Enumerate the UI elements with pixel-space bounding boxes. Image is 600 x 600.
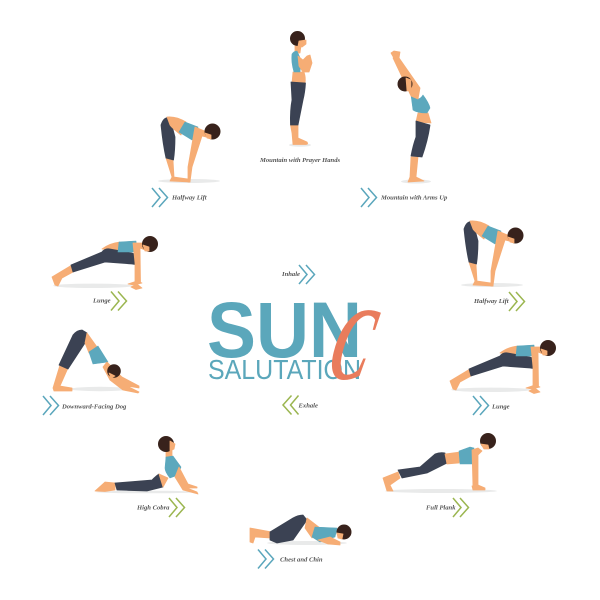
pose: Mountain with Arms Up (361, 51, 448, 207)
breath key: inhale (281, 265, 314, 284)
arrow: chevrons (169, 498, 184, 517)
label: Downward-Facing Dog: Downward-Facing Dog (61, 404, 127, 410)
arrow: inhale chevrons (299, 265, 314, 284)
figure: halfway lift (461, 221, 524, 287)
pose: Lunge (right) (450, 340, 556, 415)
pose: High Cobra (95, 436, 198, 517)
label: Mountain with Arms Up: Mountain with Arms Up (380, 194, 448, 202)
figure: mountain arms up (391, 51, 431, 184)
title word: SALUTATION: SALUTATION (208, 354, 361, 385)
pose: Full Plank (383, 433, 497, 517)
arrow: exhale chevrons (283, 396, 298, 414)
breath key: exhale (283, 396, 318, 414)
label: Halfway Lift: Halfway Lift (473, 298, 509, 305)
arrow: chevrons (258, 550, 274, 568)
pose: Mountain with Prayer Hands (259, 31, 340, 164)
figure: lunge (52, 236, 158, 290)
title word: SUN: SUN (207, 285, 362, 374)
label: High Cobra: High Cobra (136, 504, 170, 512)
title: Sun Salutation C (207, 285, 388, 402)
figure: halfway lift (158, 117, 220, 183)
arrow: chevrons (453, 498, 468, 517)
pose: Halfway Lift (ascending side) (461, 221, 524, 311)
arrow: chevrons (509, 292, 524, 311)
figure: chest and chin (250, 515, 352, 545)
arrow: chevrons (43, 396, 58, 415)
arrow: chevrons (361, 188, 376, 207)
pose: Chest and Chin (250, 515, 352, 568)
label: Inhale: Inhale (281, 271, 300, 278)
figure: mountain prayer (289, 31, 312, 147)
pose: Downward-Facing Dog (43, 330, 139, 415)
figure: downward dog (53, 330, 139, 393)
figure: full plank (383, 433, 497, 493)
figure: high cobra (95, 436, 198, 494)
title letter: C: C (319, 286, 388, 402)
label: Full Plank: Full Plank (426, 504, 456, 512)
label: Lunge: Lunge (92, 298, 111, 304)
label: Mountain with Prayer Hands: Mountain with Prayer Hands (259, 157, 340, 164)
label: Chest and Chin: Chest and Chin (280, 556, 323, 564)
pose: Lunge (left) (52, 236, 158, 310)
arrow: chevrons (152, 188, 168, 207)
arrow: chevrons (111, 292, 126, 310)
pose: Halfway Lift (descending side) (152, 117, 220, 207)
label: Halfway Lift: Halfway Lift (171, 194, 207, 202)
label: Lunge: Lunge (491, 404, 510, 410)
label: Exhale: Exhale (298, 402, 318, 410)
figure: lunge (450, 340, 556, 394)
arrow: chevrons (473, 396, 488, 415)
